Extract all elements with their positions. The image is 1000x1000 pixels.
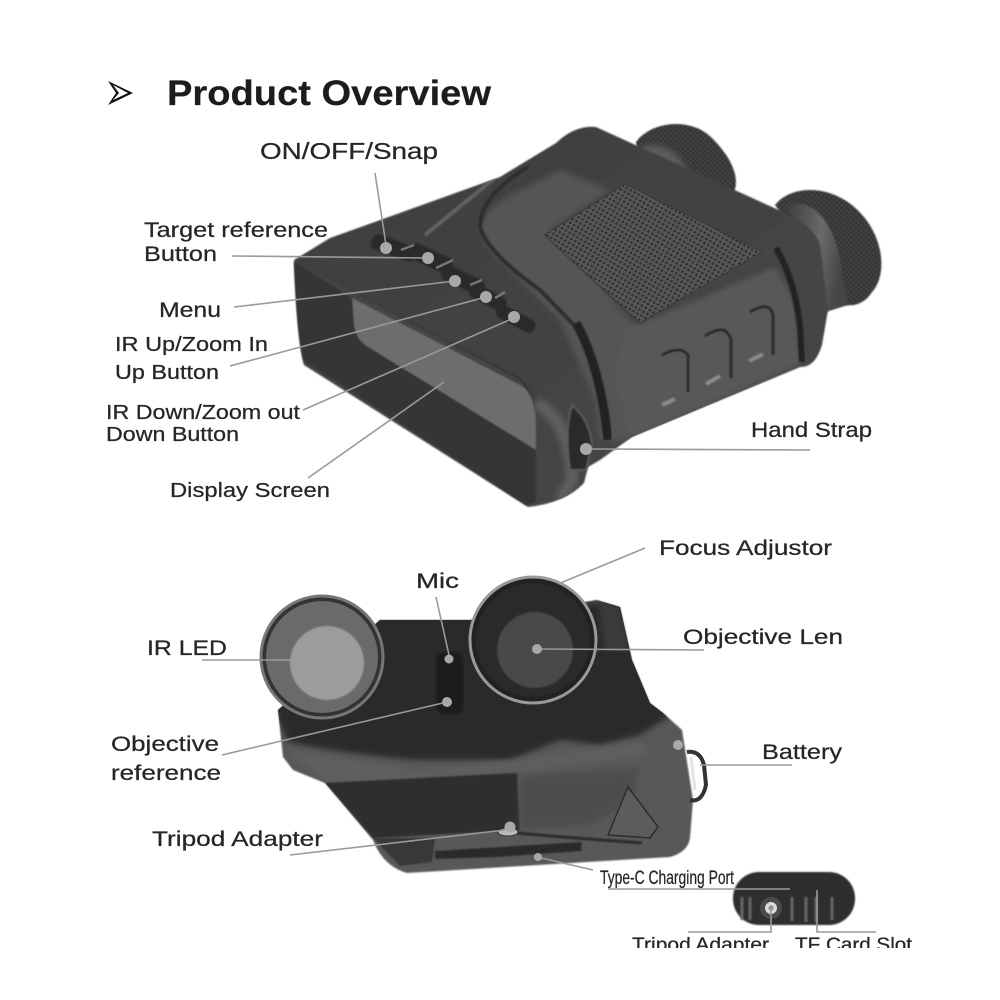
hand strap mount (567, 405, 592, 470)
callout: Display Screen: Display Screen (170, 480, 330, 502)
callout: Mic: Mic (416, 569, 459, 593)
callout: Focus Adjustor: Focus Adjustor (659, 536, 832, 560)
callout: ON/OFF/Snap (260, 138, 438, 254)
callout: Battery (673, 740, 842, 765)
callout: Objective Len (532, 625, 843, 654)
callout: Objective Len: Objective Len (683, 625, 843, 649)
callout: Target reference Button: Target reference (144, 218, 328, 242)
callout: inset Tripod Adapter (632, 905, 771, 956)
callout: inset Tripod Adapter: Tripod Adapter (632, 935, 770, 956)
battery loop (687, 752, 706, 800)
triangular grip (608, 787, 658, 838)
right lens (470, 577, 596, 703)
binocular body (294, 127, 828, 507)
callout: TF Card Slot (795, 890, 913, 956)
callout: IR Down/Zoom out (106, 311, 520, 446)
callout: Objective reference: Objective (111, 732, 219, 756)
title: Product Overview (167, 74, 492, 113)
body ridge and shading (425, 167, 802, 500)
textured side (598, 600, 630, 650)
callout: IR Up/Zoom In: IR Up/Zoom In (115, 334, 268, 356)
left lens (261, 596, 383, 718)
callout: Display Screen (170, 382, 444, 502)
callout: Objective reference: reference (111, 761, 221, 785)
tripod washer (498, 828, 518, 836)
callout: Type-C Charging Port: Type-C Charging Port (600, 868, 735, 889)
callout: Tripod Adapter (152, 822, 516, 855)
front face shadow (270, 600, 672, 760)
callout: Objective reference (111, 697, 452, 785)
mic panel (436, 652, 463, 714)
side grip slots (662, 307, 773, 405)
callout: IR LED: IR LED (147, 636, 227, 660)
callout: IR Up/Zoom In: Up Button (115, 362, 219, 384)
inset: bottom port view (733, 872, 855, 925)
grip texture panel (544, 184, 762, 323)
button strip (369, 232, 538, 335)
base slot (435, 842, 582, 859)
callout: Type-C Charging Port (534, 853, 790, 889)
lit band (322, 758, 518, 784)
lower rim shadow (373, 838, 435, 866)
callout: IR Down/Zoom out: Down Button (106, 424, 239, 446)
callout: Menu: Menu (159, 298, 221, 322)
callout: IR Down/Zoom out: IR Down/Zoom out (106, 402, 301, 424)
right face (520, 768, 640, 830)
callout: Target reference Button: Button (144, 242, 217, 266)
callout: Tripod Adapter: Tripod Adapter (152, 827, 323, 851)
callout: TF Card Slot: TF Card Slot (795, 935, 913, 956)
callout: Mic (416, 569, 459, 664)
callout: Battery: Battery (762, 740, 842, 764)
callout: Focus Adjustor (558, 536, 832, 584)
device: front view of binoculars (261, 577, 706, 873)
eyepiece: rear right knob (775, 190, 881, 312)
callout: Hand Strap: Hand Strap (751, 418, 872, 442)
display hood interior (294, 262, 536, 505)
button markers (401, 245, 505, 298)
eyepiece: rear left knob (636, 124, 736, 215)
callout: IR Up/Zoom In (115, 291, 492, 384)
device: top view of binoculars (294, 124, 881, 507)
callout: Target reference Button (144, 218, 434, 266)
display screen (352, 298, 536, 450)
lower body (278, 600, 693, 873)
underside dark panel (325, 773, 520, 838)
callout: Hand Strap (580, 418, 872, 455)
callout: ON/OFF/Snap: ON/OFF/Snap (260, 138, 438, 164)
callout: Menu (159, 275, 461, 322)
